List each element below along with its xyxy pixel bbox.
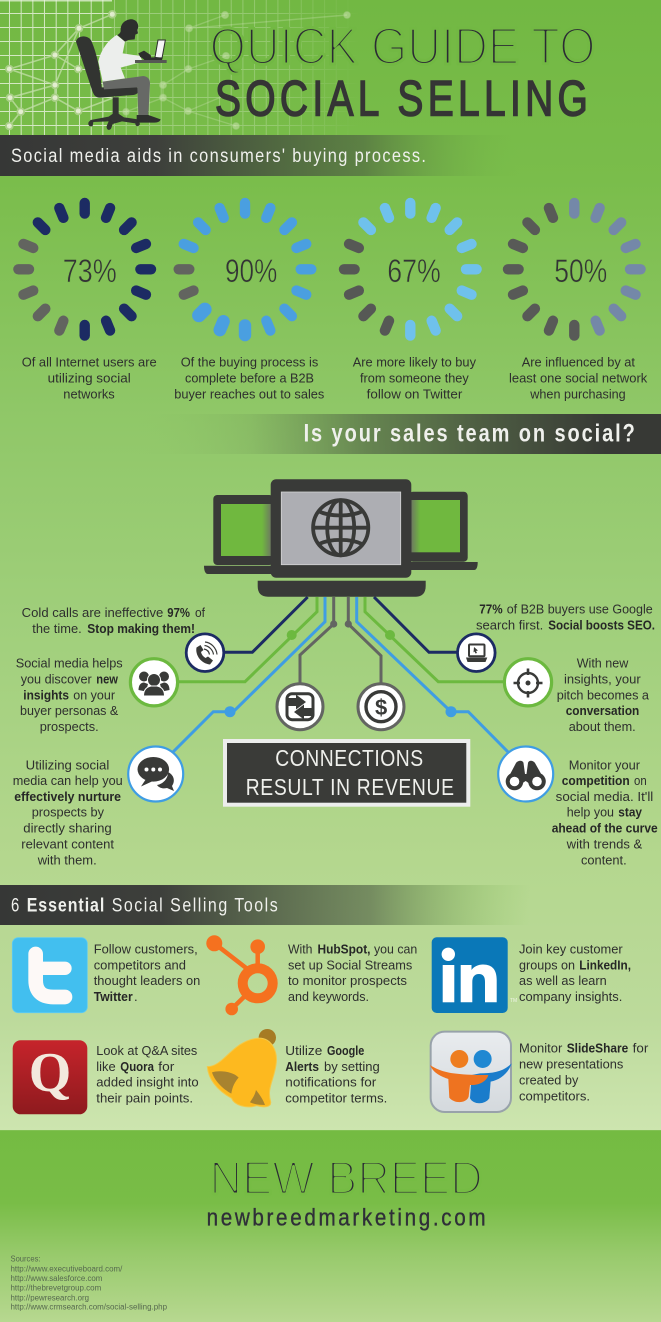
text: google alerts: Google [327,1043,364,1058]
icon: linkedin: TM [510,998,517,1004]
text: new insights: insights [23,687,69,702]
text: google alerts [285,1043,387,1106]
text: conversation [557,656,650,734]
text: slideshare: Monitor [519,1041,563,1056]
text: conversation: about them. [569,719,636,734]
text: linkedin: as well as learn [519,973,607,988]
caption 67%: Are more likely to buy [353,355,476,370]
center laptop [258,479,426,597]
text: new insights: you discover [21,671,92,686]
sources [10,1255,168,1311]
text: twitter: thought leaders on [94,973,200,988]
text: cold calls: of [195,605,205,620]
text: monitor competition: on [634,773,647,788]
title [210,18,596,126]
icon: dollar [358,684,404,730]
value 50%: 50% [554,253,607,289]
text: new insights: Social media helps [16,656,123,671]
text: monitor competition: with trends & [566,836,643,851]
icon: laptop [458,634,495,672]
sources: http://www.salesforce.com [10,1274,103,1283]
text: quora: added insight into [96,1075,199,1090]
footer brand: newbreedmarketing.com [207,1204,486,1231]
text: new insights: prospects. [40,719,99,734]
icon: people [130,659,178,706]
text: hubspot [288,941,417,1004]
text: google alerts: by setting [324,1059,380,1074]
footer background [0,1130,661,1322]
text: conversation: conversation [566,703,639,718]
text: twitter [94,941,200,1004]
text: slideshare: competitors. [519,1088,590,1103]
section banner: tools [0,885,530,925]
value 90%: 90% [225,253,277,289]
sources: http://www.crmsearch.com/social-selling.php [10,1302,168,1311]
globe [313,500,368,555]
text: nurture prospects: with them. [37,852,97,867]
text: google alerts: notifications for [285,1075,377,1090]
section banner: social media aids [0,135,520,176]
connector lines [173,597,508,752]
text: monitor competition [552,757,658,867]
caption 90%: Of the buying process is [181,355,319,370]
icon: three laptops with globe [204,479,478,597]
text: monitor competition: help you [567,805,614,820]
caption 50%: Are influenced by at [522,355,635,370]
tool: linkedin [432,937,631,1013]
legs and shoe [103,76,161,123]
text: hubspot: set up Social Streams [288,957,413,972]
text: google alerts: competitor terms. [285,1091,387,1106]
text: cold calls: the time. [32,621,82,636]
sources: http://www.executiveboard.com/ [10,1265,123,1274]
section banner: sales team: Is your sales team on social? [304,420,635,447]
caption 50%: least one social network [509,371,648,386]
text: linkedin: groups on [519,957,575,972]
caption 67%: from someone they [360,371,469,386]
ring 67% [339,198,482,341]
text: quora: Quora [120,1059,155,1074]
text: slideshare: for [633,1041,649,1056]
caption 73%: networks [63,387,115,402]
text: nurture prospects: relevant content [21,836,114,851]
tool: slideshare [430,1032,649,1112]
icon: quora [13,1040,87,1114]
icon: target [504,659,552,706]
text: google search: search first. [476,617,543,632]
sources: http://thebrevetgroup.com [10,1284,102,1293]
icon: twitter [12,938,87,1013]
text: new insights: on your [73,687,116,702]
text: slideshare [519,1041,649,1103]
text: monitor competition: Monitor your [569,757,641,772]
connector nodes [224,620,456,717]
tool: twitter [12,938,200,1013]
caption 50% [509,355,648,402]
icon: hubspot sprocket [206,935,273,1015]
text: twitter: Follow customers, [94,941,198,956]
caption 67% [353,355,476,402]
text: nurture prospects: media can help you [13,773,123,788]
text: cold calls: 97% [167,605,190,620]
text: google search: of B2B buyers use Google [507,601,653,616]
text: nurture prospects: prospects by [32,805,104,820]
icon: bell [207,1029,276,1107]
text: slideshare: new presentations [519,1057,624,1072]
text: conversation: With new [577,656,629,671]
title: SOCIAL SELLING [215,70,588,126]
right laptop [409,492,478,570]
text: google alerts: Alerts [285,1059,319,1074]
text: cold calls: Cold calls are ineffective [22,605,163,620]
callout: connections result in revenue: RESULT IN REVENUE [246,776,454,800]
text: monitor competition: stay [618,805,643,820]
caption 73%: utilizing social [48,371,131,386]
text: nurture prospects: Utilizing social [26,757,109,772]
text: linkedin [519,941,631,1004]
text: new insights: buyer personas & [20,703,119,718]
title: QUICK GUIDE TO [210,18,596,76]
text: nurture prospects: directly sharing [23,821,112,836]
sources: Sources: [10,1255,40,1264]
text: monitor competition: social media. It'll [556,789,653,804]
text: google alerts: Utilize [285,1043,322,1058]
text: monitor competition: content. [581,852,627,867]
ring 90% [174,198,316,341]
text: nurture prospects: effectively nurture [14,789,121,804]
icon: chat bubbles [128,746,183,802]
footer brand [207,1152,486,1231]
value 73%: 73% [63,253,117,289]
caption 67%: follow on Twitter [367,387,463,402]
text: twitter: . [134,989,138,1004]
stat: 73% [13,198,157,402]
value 67%: 67% [387,253,441,289]
text: quora: Look at Q&A sites [96,1043,198,1058]
text: nurture prospects [13,757,123,867]
icon: slideshare [430,1032,512,1112]
text: monitor competition: competition [562,773,630,788]
text: hubspot: and keywords. [288,989,369,1004]
text: slideshare: SlideShare [567,1041,628,1056]
laptop and desk [135,40,167,63]
text: linkedin: LinkedIn, [579,957,631,972]
caption 90% [174,355,325,402]
chair [76,36,140,130]
head and hand [117,19,152,60]
icon: quora: Q [29,1042,71,1104]
tool: hubspot [206,935,417,1015]
icon: phone [186,634,224,672]
section banner: tools: Social Selling Tools [112,894,278,916]
left laptop [204,495,275,574]
text: quora: like [96,1059,116,1074]
stat: 67% [339,198,482,402]
ring 73% [13,198,156,341]
footer brand: NEW BREED [210,1152,483,1205]
text: new insights: new [96,671,119,686]
text: twitter: Twitter [94,989,133,1004]
text: google search: 77% [479,601,503,616]
caption 90%: buyer reaches out to sales [174,387,325,402]
text: new insights [16,656,123,734]
icon: swap arrows [277,684,323,730]
text: cold calls [22,605,205,636]
text: quora: their pain points. [96,1091,193,1106]
ring 50% [503,198,646,341]
text: hubspot: HubSpot, [318,941,370,956]
caption 73% [22,355,157,402]
section banner: tools: 6 [11,896,19,917]
text: hubspot: to monitor prospects [288,973,407,988]
text: hubspot: With [288,941,312,956]
header network graphic [0,0,360,135]
text: quora: for [158,1059,175,1074]
text: conversation: pitch becomes a [557,687,650,702]
icon: dollar: $ [375,695,387,720]
text: linkedin: Join key customer [519,941,623,956]
text: cold calls: Stop making them! [87,621,195,636]
callout: connections result in revenue: CONNECTIONS [275,747,423,771]
section banner: tools: Essential [27,894,104,916]
stat: 90% [174,198,325,402]
caption 50%: when purchasing [529,387,626,402]
caption 90%: complete before a B2B [185,371,314,386]
icon: linkedin [432,937,517,1013]
text: google search [476,601,655,632]
tool: google alerts [207,1029,387,1107]
section banner: social media aids: Social media aids in consumers' buying process. [11,145,426,166]
text: linkedin: company insights. [519,989,622,1004]
callout: connections result in revenue [225,741,468,805]
sources: http://pewresearch.org [10,1293,89,1302]
shirt [98,35,143,82]
text: conversation: insights, your [564,671,641,686]
section banner: sales team [135,414,661,454]
stat: 50% [503,198,648,402]
text: slideshare: created by [519,1072,579,1087]
icon: binoculars [498,746,553,802]
text: twitter: competitors and [94,957,186,972]
icon: man at laptop in office chair [76,19,167,130]
text: quora [96,1043,199,1106]
caption 73%: Of all Internet users are [22,355,157,370]
text: hubspot: you can [374,941,417,956]
tool: quora [13,1040,199,1114]
